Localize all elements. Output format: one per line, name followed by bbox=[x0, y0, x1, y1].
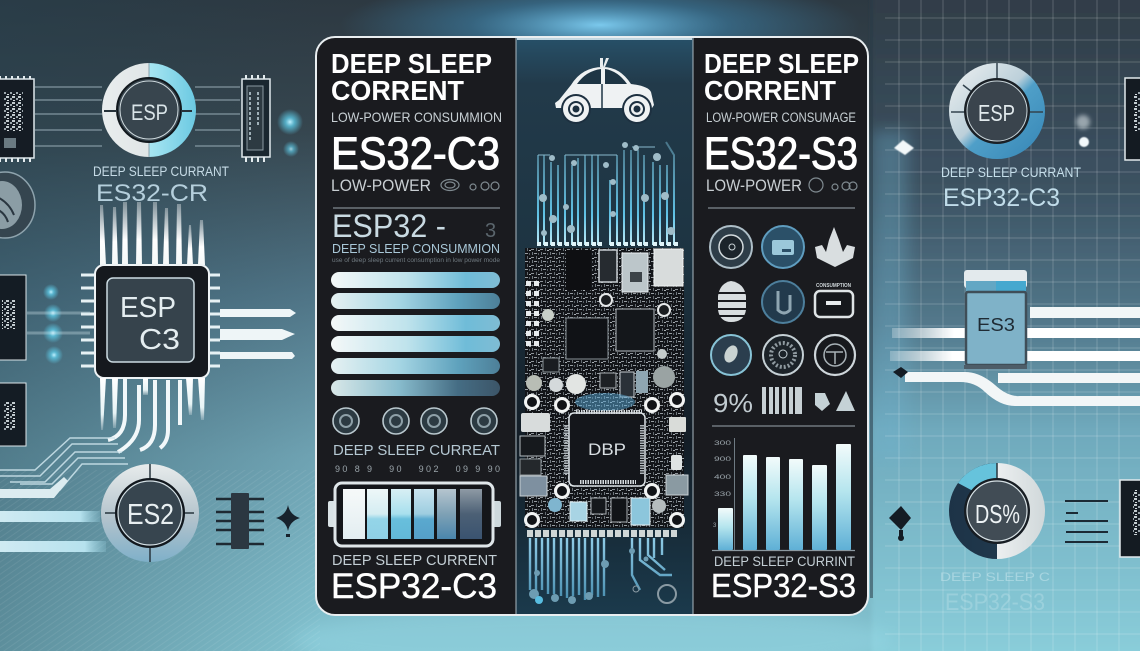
bar chart: 400 bbox=[714, 475, 732, 481]
icon grid bbox=[710, 226, 855, 375]
chips: board middle bbox=[543, 309, 654, 397]
bands: lower left bbox=[0, 477, 106, 552]
bar chart: 300 bbox=[714, 441, 732, 447]
heading: DEEP SLEEP CORRENT right: CORRENT bbox=[704, 75, 836, 106]
icon: face ring bbox=[815, 335, 855, 375]
text: faded caption: DEEP SLEEP C bbox=[940, 570, 1050, 584]
text: tiny caption: use of deep sleep current consumption in low power mode bbox=[332, 258, 501, 264]
pins: bottom of center chip with curved traces bbox=[0, 378, 205, 490]
badge: ES2 circle: ES2 bbox=[127, 499, 174, 531]
wires: right block bbox=[890, 307, 1140, 406]
components: white mount rings bbox=[526, 394, 684, 526]
text: percent: 9% bbox=[713, 388, 753, 418]
text: ES32-CR: ES32-CR bbox=[96, 180, 208, 207]
pins: top of center chip bbox=[100, 202, 205, 265]
icon: IC pins right bbox=[1065, 501, 1108, 542]
icon: seed ring bbox=[711, 335, 751, 375]
chip: lower far right bbox=[1120, 480, 1140, 557]
circuit traces: top bbox=[537, 142, 678, 246]
connection lines: upper circle bbox=[35, 87, 240, 146]
icon: small diamond bbox=[893, 367, 908, 378]
text: deep sleep current right caption: DEEP SLEEP CURRINT bbox=[714, 553, 855, 569]
chip: middle left bbox=[0, 275, 26, 360]
heading: DEEP SLEEP CORRENT bbox=[331, 48, 492, 106]
icon: ES3 block: ES3 bbox=[977, 315, 1015, 335]
pads: board left column bbox=[526, 281, 539, 346]
icon: stripe bars bbox=[762, 387, 802, 414]
text: low-power: LOW-POWER bbox=[331, 176, 431, 195]
badge: ESP circle bbox=[102, 63, 196, 157]
components: discs bbox=[526, 294, 675, 394]
bar chart bbox=[712, 438, 855, 550]
chip: ESP C3: C3 bbox=[139, 324, 180, 356]
text: ESP32-C3 right top: ESP32-C3 bbox=[943, 184, 1060, 212]
chip: DBP: DBP bbox=[588, 440, 626, 459]
icons: low-power glyphs bbox=[441, 180, 499, 190]
text: deep sleep consumption: DEEP SLEEP CONSUMMION bbox=[332, 241, 500, 256]
icons: low-power glyphs right bbox=[809, 178, 857, 192]
icon: number glyph: 3 bbox=[485, 220, 496, 242]
pad row: bottom of board bbox=[527, 530, 677, 537]
panel: ESP32-C3 left column bbox=[328, 48, 502, 606]
text: faded ESP32-S3: ESP32-S3 bbox=[945, 589, 1045, 616]
heading: ESP32 -: ESP32 - bbox=[332, 208, 446, 244]
text: low-power right: LOW-POWER bbox=[706, 176, 802, 195]
icon: gear ring bbox=[763, 335, 803, 375]
circuit board bbox=[520, 248, 688, 528]
heading: DEEP SLEEP CORRENT right: DEEP SLEEP bbox=[704, 48, 859, 79]
bar chart: 3 bbox=[713, 523, 717, 529]
chip: ESP C3 bbox=[95, 265, 209, 378]
icon: fingerprint oval bbox=[0, 172, 35, 238]
icon: badge screen bbox=[815, 283, 853, 317]
badge: DS% circle: DS% bbox=[975, 499, 1020, 529]
components: left of main chip bbox=[520, 413, 688, 496]
icon: striped drum bbox=[717, 281, 747, 322]
badge: ESP circle right: ESP bbox=[978, 100, 1015, 126]
icon: lotus bbox=[815, 227, 855, 267]
icon: folder bbox=[762, 226, 804, 268]
chips: board top row bbox=[566, 249, 683, 292]
heading: DEEP SLEEP CORRENT: DEEP SLEEP bbox=[331, 48, 492, 79]
badge: ES2 circle bbox=[101, 464, 199, 562]
right side: ESP circuit diagram bbox=[889, 63, 1140, 616]
text: deep sleep current caption: DEEP SLEEP CURRENT bbox=[332, 552, 497, 569]
chip: upper far right bbox=[1125, 78, 1140, 160]
icons: four round badges bbox=[333, 408, 497, 434]
bar list bbox=[331, 272, 500, 396]
icon: ring clock bbox=[710, 226, 752, 268]
icon: badge screen: CONSUMPTION bbox=[816, 283, 851, 289]
grid background: right side bbox=[885, 0, 1140, 651]
heading: ES32-C3: ES32-C3 bbox=[331, 128, 500, 179]
dividers inside columns bbox=[333, 208, 855, 426]
heading: DEEP SLEEP CORRENT: CORRENT bbox=[331, 75, 464, 106]
glowing dots: left of center chip bbox=[27, 284, 90, 364]
icon: car bbox=[555, 58, 654, 124]
icon: triangles bbox=[815, 391, 855, 411]
chip: lower left bbox=[0, 383, 26, 446]
pins: sides of center chip bbox=[81, 275, 220, 366]
panel: ESP32-S3 right column bbox=[704, 48, 859, 604]
badge: ESP circle: ESP bbox=[131, 100, 168, 125]
chip: upper right bbox=[242, 75, 270, 162]
icon: battery bbox=[328, 483, 501, 546]
text: deep sleep current left: DEEP SLEEP CURRANT bbox=[93, 163, 229, 179]
icon: round glyph bbox=[762, 281, 804, 323]
icon: diamond right bbox=[889, 506, 911, 541]
arrows: right of center chip bbox=[220, 309, 296, 359]
heading: ESP32-C3: ESP32-C3 bbox=[331, 567, 497, 606]
heading: DEEP SLEEP CORRENT right bbox=[704, 48, 859, 106]
bar chart: 900 bbox=[714, 457, 732, 463]
circuit traces: bottom bbox=[529, 538, 676, 604]
chip: DBP bbox=[566, 412, 645, 486]
panel: center column bbox=[516, 38, 693, 614]
text: low-power consumage: LOW-POWER CONSUMAGE bbox=[706, 110, 856, 125]
text: deep sleep current right top: DEEP SLEEP CURRANT bbox=[941, 164, 1081, 180]
main panel bbox=[316, 37, 868, 615]
badge: ESP circle right bbox=[949, 63, 1045, 159]
glowing dots: upper right bbox=[277, 109, 303, 157]
icon: diamond left bbox=[276, 505, 300, 537]
text: deep sleep current: DEEP SLEEP CURREAT bbox=[333, 442, 500, 459]
chip: upper left bbox=[0, 76, 34, 162]
text: low-power consumption: LOW-POWER CONSUMMION bbox=[331, 109, 502, 125]
badge: DS% circle bbox=[949, 463, 1045, 559]
text: tiny numbers: 90 8 9 90 902 09 9 90 bbox=[335, 464, 500, 474]
heading: ESP32-S3: ESP32-S3 bbox=[711, 567, 856, 604]
heading: ES32-S3: ES32-S3 bbox=[704, 128, 858, 179]
components: blue parts bbox=[548, 498, 666, 525]
bar chart: 330 bbox=[714, 492, 732, 498]
chip: ESP C3: ESP bbox=[120, 292, 176, 324]
icon: ES3 block bbox=[964, 270, 1027, 369]
blue glow: above main chip bbox=[575, 393, 635, 411]
glow blobs: upper right bbox=[894, 115, 1090, 155]
left side: ESP circuit diagram bbox=[0, 63, 303, 562]
icon: small IC bbox=[216, 493, 264, 549]
